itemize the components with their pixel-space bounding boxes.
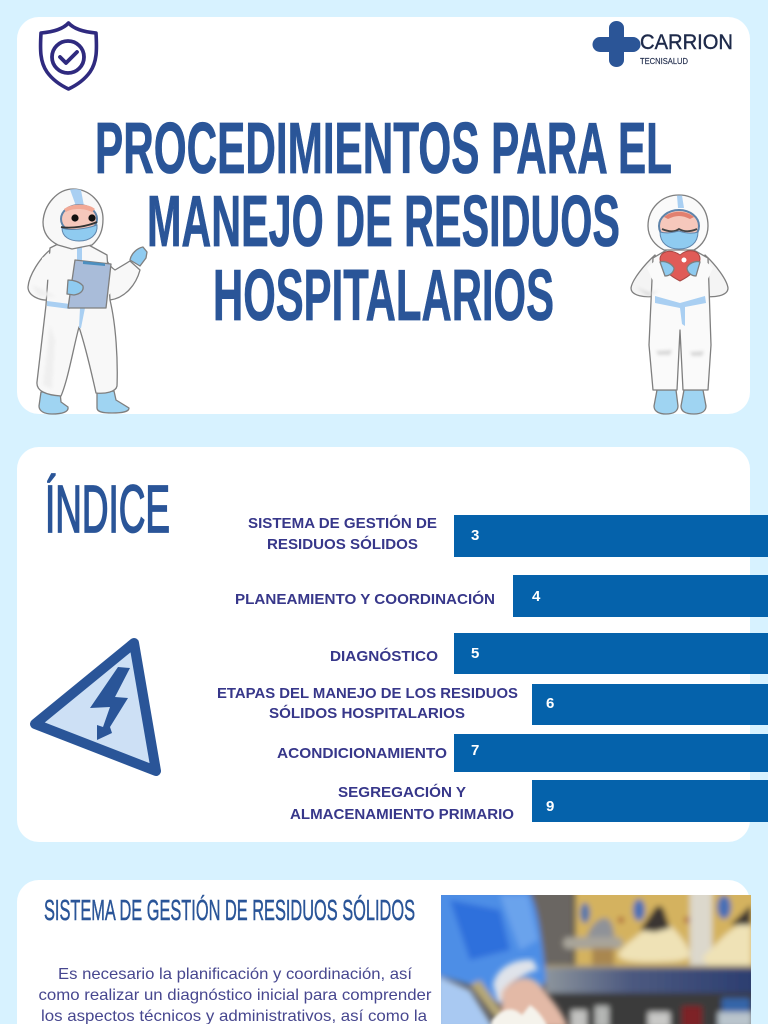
index row: page 9 <box>290 780 768 823</box>
icon: security shield <box>41 23 96 89</box>
index heading: ÍNDICE <box>45 472 170 547</box>
index row: page 7 <box>277 734 768 772</box>
section heading: SISTEMA DE GESTIÓN DE RESIDUOS SÓLIDOS <box>44 894 415 927</box>
index row: page 7: 7 <box>471 742 479 759</box>
index row: page 4: PLANEAMIENTO Y COORDINACIÓN <box>235 590 495 608</box>
index row: page 6: 6 <box>546 695 554 712</box>
panel: title header <box>17 17 750 414</box>
index row: page 3 <box>248 514 768 557</box>
body text: como realizar un diagnóstico inicial para comprender <box>38 987 432 1004</box>
index row: page 5: 5 <box>471 645 479 662</box>
logo: Carrion Tecnisalud: CARRION <box>640 31 733 54</box>
index row: page 7: ACONDICIONAMIENTO <box>277 745 447 762</box>
index row: page 3: RESIDUOS SÓLIDOS <box>267 535 418 553</box>
index row: page 6 <box>217 684 768 725</box>
index row: page 4: 4 <box>532 588 541 605</box>
index row: page 5: DIAGNÓSTICO <box>330 647 438 665</box>
index row: page 9: 9 <box>546 798 554 815</box>
index row: page 3: 3 <box>471 527 479 544</box>
title <box>95 109 672 336</box>
index row: page 9: SEGREGACIÓN Y <box>338 783 466 801</box>
icon: electrical hazard triangle <box>35 643 156 771</box>
index row: page 5 <box>330 633 768 674</box>
logo: Carrion Tecnisalud <box>593 21 733 67</box>
index row: page 6: SÓLIDOS HOSPITALARIOS <box>269 704 465 722</box>
panel: solid waste management system <box>17 880 760 1024</box>
index row: page 4 <box>235 575 768 617</box>
illustration: health worker with clipboard <box>28 189 147 414</box>
illustration: health worker holding heart <box>631 195 728 414</box>
body text: Es necesario la planificación y coordinación, así <box>58 966 413 983</box>
index row: page 6: ETAPAS DEL MANEJO DE LOS RESIDUOS <box>217 685 518 702</box>
logo: Carrion Tecnisalud: TECNISALUD <box>640 57 688 66</box>
body text <box>38 966 432 1024</box>
panel: index <box>17 447 768 842</box>
photo: gloved hand handling hospital waste <box>441 895 751 1024</box>
index row: page 9: ALMACENAMIENTO PRIMARIO <box>290 806 514 823</box>
index row: page 3: SISTEMA DE GESTIÓN DE <box>248 514 437 532</box>
